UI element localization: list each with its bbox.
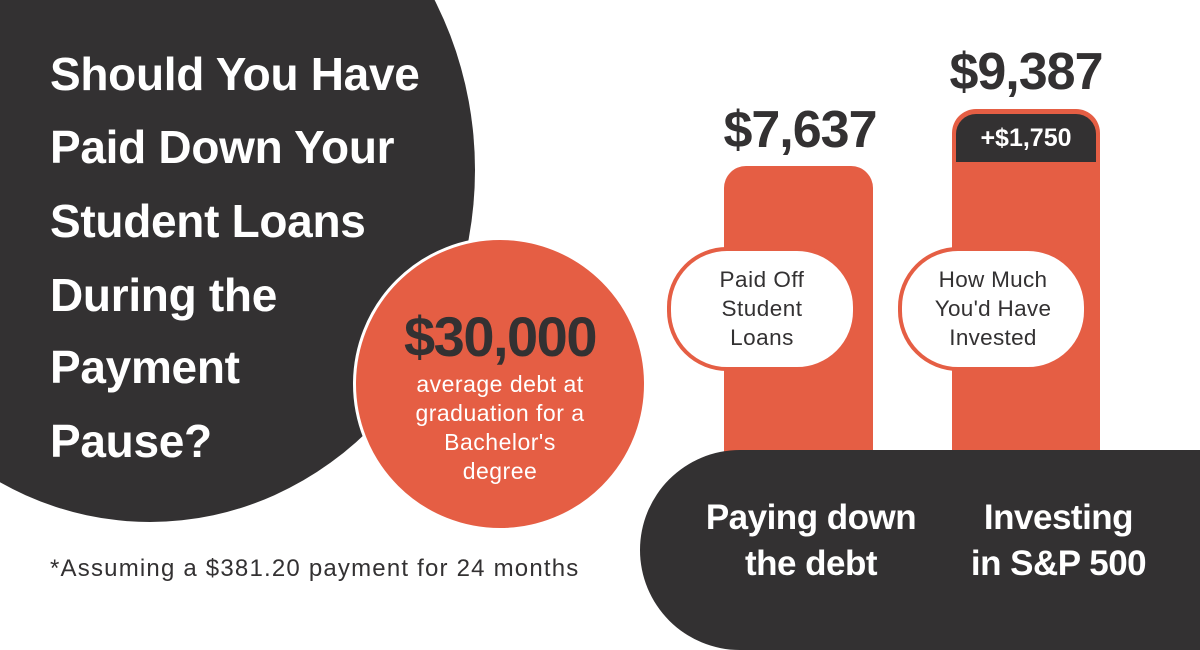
pill label: how much you'd have invested: You'd Have — [935, 296, 1051, 321]
bar: investing — [952, 109, 1100, 456]
callout circle: $30,000: Bachelor's — [444, 429, 556, 455]
callout circle: $30,000 — [353, 237, 647, 531]
title: Student Loans — [50, 195, 366, 247]
label: investing in S&P 500: Investing — [984, 498, 1133, 537]
value: $7,637: $7,637 — [723, 101, 877, 159]
bottom dark panel with category labels — [640, 450, 1200, 650]
label: paying down the debt: the debt — [745, 544, 877, 583]
callout circle: $30,000: graduation for a — [415, 400, 585, 426]
title: Payment — [50, 341, 240, 393]
pill label: how much you'd have invested: Invested — [949, 325, 1037, 350]
label: investing in S&P 500 — [971, 498, 1146, 583]
cap: +$1,750 — [956, 114, 1096, 162]
pill label: paid off student loans: Paid Off — [720, 267, 804, 292]
title: During the — [50, 269, 277, 321]
pill label: paid off student loans: Student — [721, 296, 803, 321]
title: Should You Have — [50, 48, 420, 100]
bar: paying down debt — [724, 166, 873, 456]
callout circle: $30,000: degree — [463, 458, 537, 484]
label: paying down the debt — [706, 498, 916, 583]
label: investing in S&P 500: in S&P 500 — [971, 544, 1146, 583]
footnote: *Assuming a $381.20 payment for 24 months — [50, 555, 579, 582]
callout circle: $30,000: average debt at — [416, 371, 584, 397]
pill label: how much you'd have invested: How Much — [939, 267, 1047, 292]
pill label: how much you'd have invested — [898, 247, 1088, 371]
title — [50, 48, 420, 467]
callout circle: $30,000: $30,000 — [404, 305, 596, 368]
label: paying down the debt: Paying down — [706, 498, 916, 537]
value: $9,387: $9,387 — [949, 43, 1103, 101]
cap: +$1,750: +$1,750 — [980, 124, 1072, 152]
pill label: paid off student loans — [667, 247, 857, 371]
title: Pause? — [50, 415, 212, 467]
title: Paid Down Your — [50, 121, 394, 173]
pill label: paid off student loans: Loans — [730, 325, 794, 350]
